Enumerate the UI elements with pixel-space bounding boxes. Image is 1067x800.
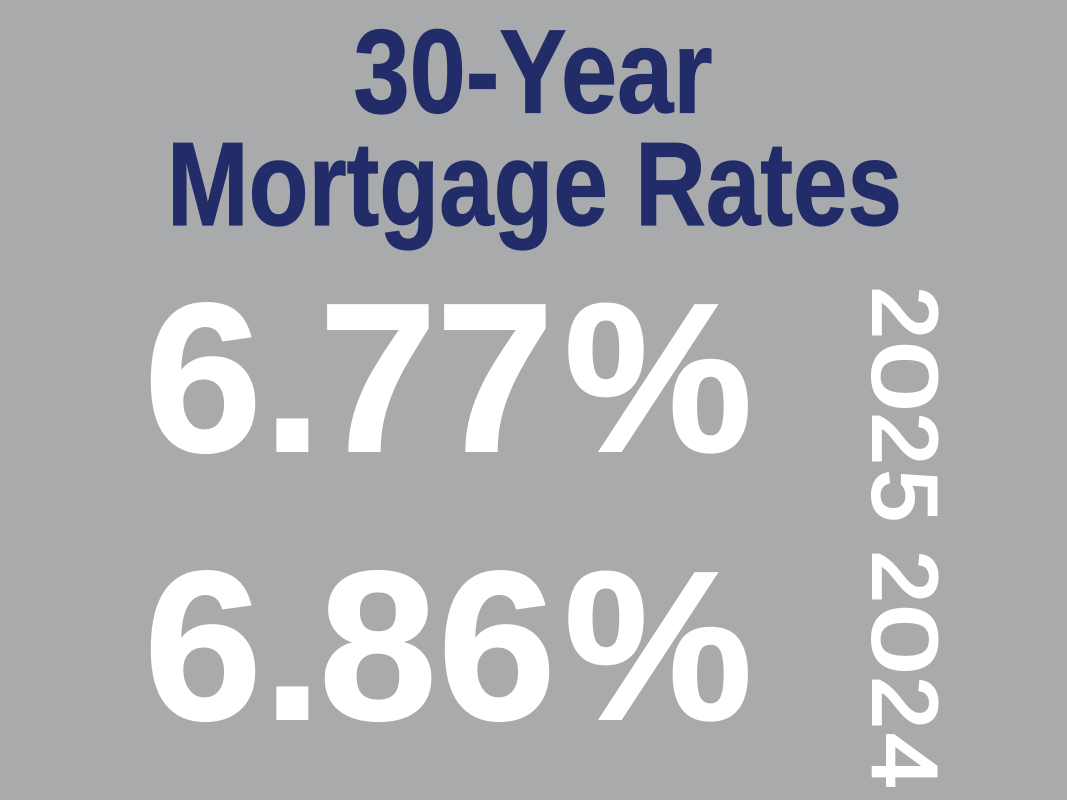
year label 2025: 5 [854, 470, 956, 522]
rate 2024: 6.86%: 6 [144, 527, 262, 764]
rate 2025: 6.77%: . [263, 259, 322, 496]
year label 2024: 4 [853, 734, 955, 788]
year label 2024: 0 [853, 605, 955, 674]
rate 2025: 6.77%: 7 [436, 259, 554, 496]
rate 2024: 6.86%: % [564, 527, 753, 764]
year label 2025: 2 [854, 412, 956, 465]
title: Mortgage Rates [167, 118, 902, 251]
rate 2025: 6.77%: 6 [144, 259, 262, 496]
title [167, 6, 902, 251]
year label 2025: 0 [853, 342, 955, 411]
rate 2024: 6.86%: . [263, 527, 322, 764]
year label 2024: 2 [854, 550, 956, 603]
rate 2024: 6.86%: 6 [438, 527, 556, 764]
year label 2025 [853, 286, 956, 522]
title: 30-Year [354, 6, 712, 138]
rate 2025: 6.77%: 7 [319, 259, 437, 496]
rate 2025: 6.77%: % [564, 259, 753, 496]
year label 2024: 2 [854, 676, 956, 729]
rate 2024: 6.86%: 8 [319, 527, 437, 764]
year label 2024 [853, 550, 956, 788]
year label 2025: 2 [854, 286, 956, 339]
